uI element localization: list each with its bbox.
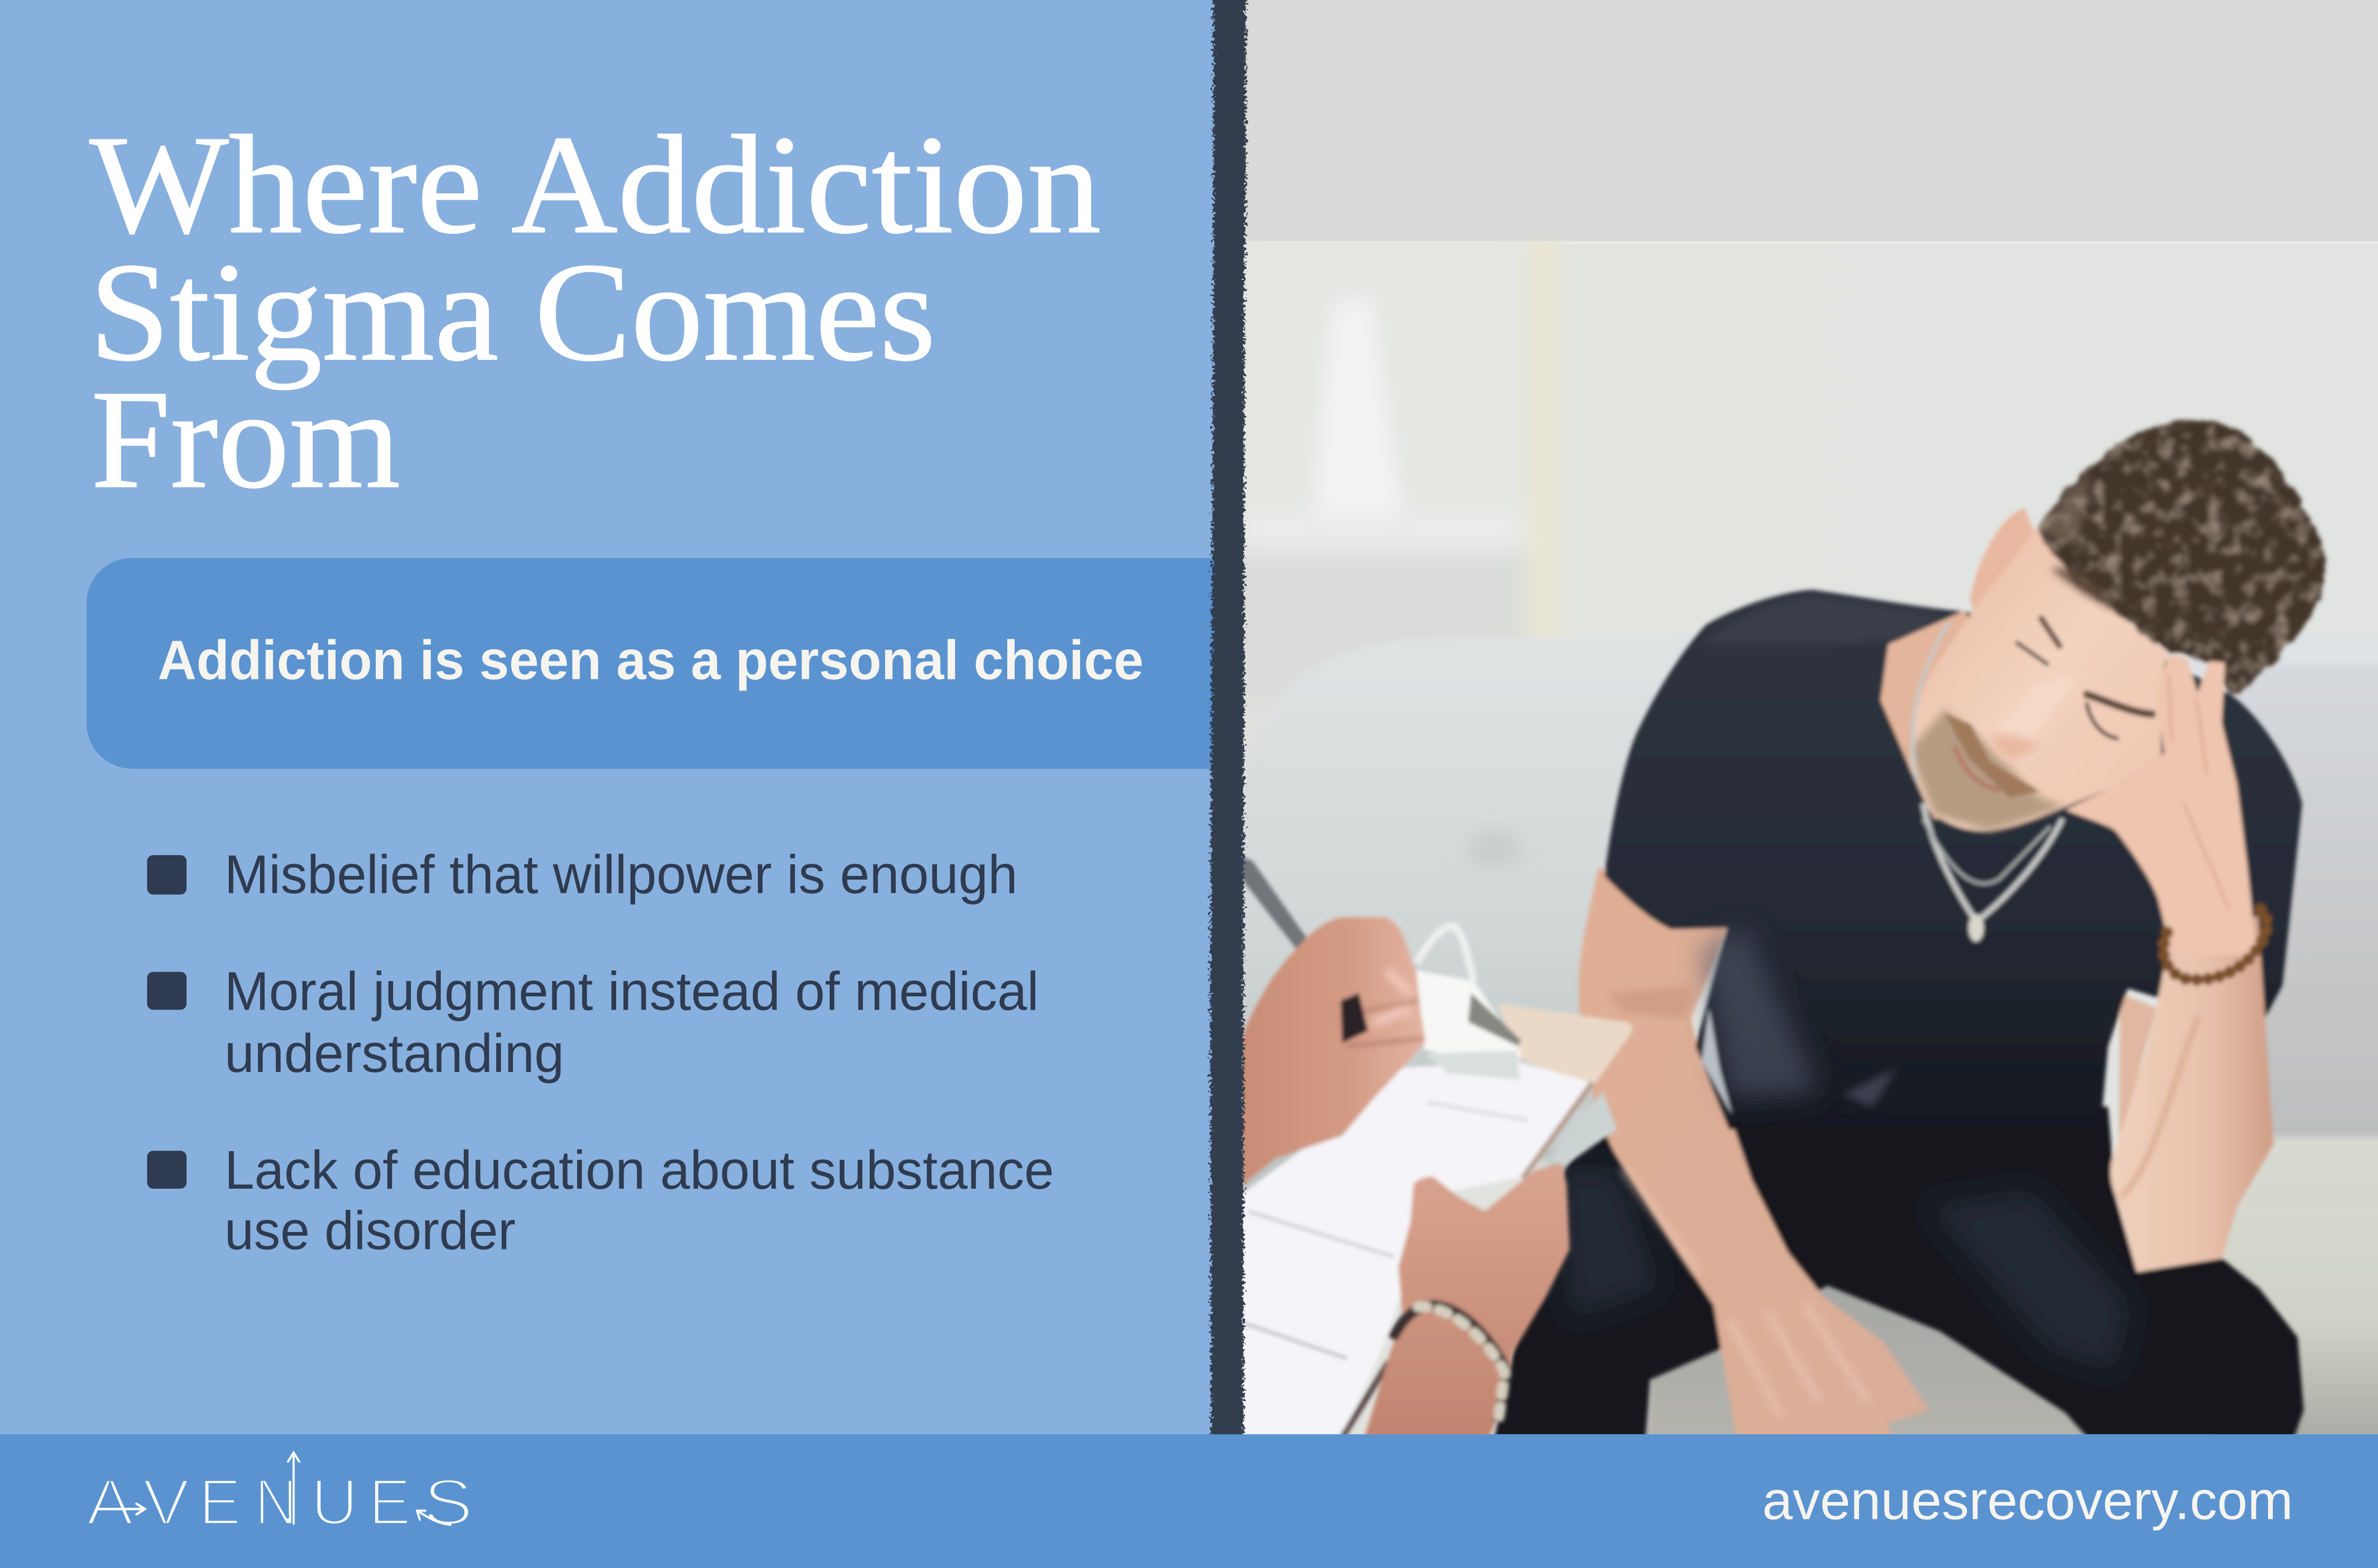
man [1494, 420, 2325, 1440]
nose [1990, 675, 2081, 761]
holding hand [1363, 1163, 1569, 1440]
logo: AVENUES: E [199, 1466, 241, 1539]
clinician bracelet [1392, 1305, 1508, 1422]
bullet: moral judgment: Moral judgment instead of medical [225, 960, 1039, 1021]
sofa tuft shadow [1471, 833, 1516, 865]
far arm behind torso [2119, 993, 2157, 1168]
moustache and mouth [1944, 713, 2040, 798]
trouser highlights [1926, 1190, 2131, 1372]
bullet: moral judgment [147, 960, 1039, 1084]
second pen shaft [1342, 1361, 1389, 1438]
paper [1236, 1061, 1592, 1440]
logo: AVENUES: N [255, 1466, 298, 1539]
photo: man in counselling session [1236, 227, 2378, 1448]
necklace [1912, 622, 2063, 941]
sofa [1236, 635, 2378, 1440]
torn dark divider stripe [1210, 0, 1246, 1440]
near arm [1578, 867, 1929, 1440]
title [89, 106, 1101, 517]
website url: avenuesrecovery.com [1762, 1470, 2293, 1531]
bullet: willpower: Misbelief that willpower is enough [225, 843, 1018, 904]
bullet: lack of education: Lack of education about substance [225, 1139, 1054, 1200]
clip [1416, 970, 1521, 1075]
bullet: moral judgment: understanding [225, 1022, 564, 1084]
bullet: lack of education [147, 1139, 1054, 1261]
logo: AVENUES: V [143, 1466, 190, 1539]
title: Where Addiction [89, 106, 1101, 263]
photo wall [1236, 235, 2378, 1448]
callout banner: personal choice [87, 558, 1229, 769]
eyes and brows [2017, 619, 2152, 739]
t-shirt shoulder panel and folds [1702, 596, 1941, 645]
t-shirt [1604, 590, 2302, 1130]
pen [1236, 854, 1313, 955]
wrist bracelet [2163, 905, 2267, 980]
logo: AVENUES: A [87, 1466, 134, 1539]
raised forearm [2111, 916, 2273, 1272]
footer band [0, 1434, 2378, 1568]
title: Stigma Comes [89, 234, 936, 390]
clipboard [1498, 1004, 1632, 1091]
grey gap behind paper [1550, 1091, 1617, 1168]
callout banner: personal choice: Addiction is seen as a personal choice [157, 630, 1144, 692]
clinician [1236, 854, 1632, 1440]
clipboard edge [1522, 1082, 1592, 1178]
logo arrows [97, 1452, 450, 1525]
bullet list [147, 843, 1054, 1261]
bullet: lack of education: use disorder [225, 1200, 516, 1261]
elbow shade [1608, 985, 1691, 1019]
writing hand [1236, 917, 1426, 1184]
gap between arm and torso [1702, 1008, 1732, 1114]
hair [2040, 420, 2325, 697]
logo: AVENUES [87, 1452, 473, 1539]
title: From [91, 361, 401, 517]
phone [2106, 766, 2169, 802]
left panel background [0, 0, 1259, 1434]
ear [1970, 508, 2040, 622]
logo: AVENUES: E [368, 1466, 411, 1539]
near arm veins [1623, 1168, 1869, 1417]
top grey band above photo [1236, 0, 2378, 242]
clip metal [1468, 993, 1521, 1046]
hand on head [2066, 655, 2256, 955]
logo: AVENUES: S [423, 1466, 473, 1539]
paper rules [1245, 1102, 1529, 1358]
neck [1881, 611, 2040, 819]
logo: AVENUES: U [311, 1466, 358, 1539]
blurred shelf and statue [1243, 241, 1561, 636]
clip handle [1416, 926, 1474, 981]
trousers [1494, 1091, 2303, 1440]
beard [1909, 710, 2066, 831]
face [1909, 525, 2167, 831]
